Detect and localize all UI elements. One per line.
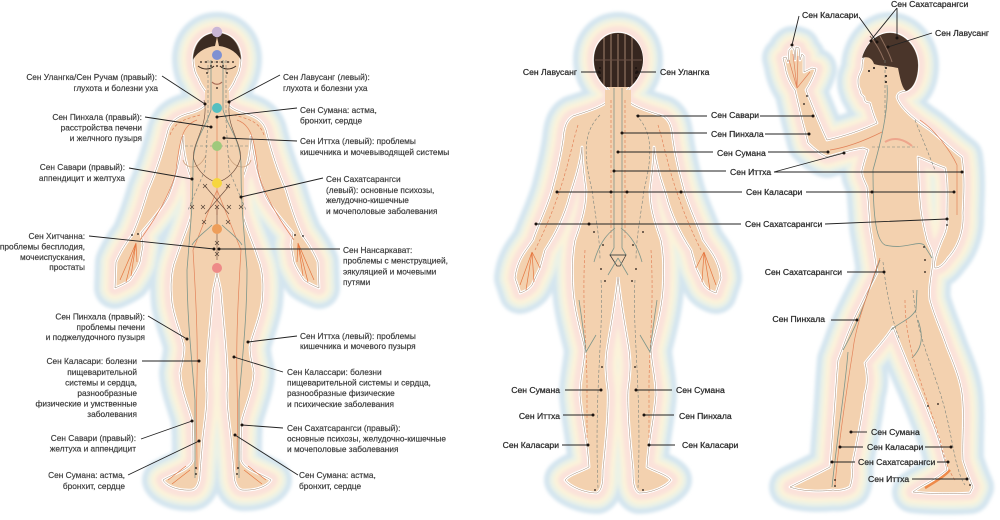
callout: Сен Сумана нижний левый	[48, 440, 200, 491]
callout: Сен Савари правый	[39, 162, 194, 183]
callout: Сен Пинхала правый нижний	[46, 312, 188, 342]
callout: Сен Иттха centre: Сен Иттха	[730, 167, 771, 177]
callout: side Сен Калаcари: Сен Каласари	[867, 442, 924, 452]
cross marks: front	[190, 184, 243, 256]
hair: side	[862, 33, 918, 91]
callout: side Сен Сахатсарангси ankle	[830, 457, 950, 467]
callout: back Сен Улангка	[636, 67, 710, 77]
energy lines: back	[520, 67, 716, 491]
callout: back Сен Улангка: Сен Улангка	[660, 67, 710, 77]
hands detail: back	[520, 252, 716, 290]
callout: side Сен Сумана: Сен Сумана	[871, 427, 920, 437]
callout: Сен Пинхала правый нижний: проблемы печени	[76, 322, 145, 332]
callout: side Сен Иттха: Сен Иттха	[868, 474, 909, 484]
callout: Сен Сахатсарангси левый: и мочеполовые заболевания	[326, 206, 437, 216]
callout: Сен Сахатсарангси левый	[240, 174, 437, 216]
callout: Сен Сахатсарангси правый: основные психозы, желудочно-кишечные	[287, 434, 446, 444]
callout: Сен Савари нижний: желтуха и аппендицит	[50, 444, 136, 454]
callout: Сен Пинхала правый	[52, 112, 212, 143]
callout: Сен Нансаркават: Сен Нансаркават:	[343, 245, 412, 255]
callout: Сен Сахатсарангси centre: Сен Сахатсарангси	[745, 219, 822, 229]
callout: Сен Иттха левый	[222, 136, 449, 157]
callout: Сен Каласари: пищеварительной	[67, 367, 137, 377]
callout: back lower Сен Иттха: Сен Иттха	[519, 411, 560, 421]
callout: Сен Нансаркават: путями	[343, 277, 371, 287]
callout: Сен Пинхала правый нижний: Сен Пинхала (правый):	[55, 312, 145, 322]
callout: Сен Лавусанг левый: глухота и болезни уха	[283, 83, 368, 93]
callout: Сен Сахатсарангси левый: желудочно-кишечные	[326, 195, 409, 205]
callout: Сен Калассари	[232, 356, 431, 409]
figure: side body	[783, 33, 973, 494]
energy lines: front	[131, 60, 304, 478]
callout: Сен Нансаркават	[218, 245, 448, 287]
callout: top Сен Лавусанг	[886, 28, 989, 48]
callout: back lower left Сен Сумана: Сен Сумана	[511, 385, 560, 395]
callout: Сен Калаcари centre: Сен Каласари	[746, 187, 803, 197]
callout: side Сен Иттха	[868, 474, 968, 484]
callout: Сен Пинхала правый: Сен Пинхала (правый):	[52, 112, 142, 122]
callout: Сен Сумана верх: Сен Сумана: астма,	[300, 105, 377, 115]
hair: back	[594, 33, 643, 87]
callout: Сен Сахатсарангси centre	[534, 218, 948, 229]
callout: Сен Пинхала centre	[620, 129, 810, 139]
callout: Сен Пинхала правый: расстройства печени	[61, 122, 142, 132]
callout: Сен Иттха левый нижний: кишечника и мочевого пузыря	[300, 341, 416, 351]
callout: back lower Сен Пинхала: Сен Пинхала	[679, 411, 732, 421]
callout: Сен Сумана нижний правый: Сен Сумана: астма,	[299, 470, 376, 480]
callout: Сен Савари нижний	[50, 420, 194, 454]
callout: Сен Каласари: Сен Каласари: болезни	[46, 356, 137, 366]
callout: Сен Иттха centre	[612, 152, 964, 177]
aura glow around all figures	[115, 33, 973, 494]
callout: Сен Каласари: разнообразные	[77, 388, 137, 398]
callout: Сен Хитчанна: проблемы бесплодия,	[0, 242, 85, 252]
hair: front	[193, 33, 241, 60]
callout: Сен Улангка/Сен Ручам: глухота и болезни уха	[74, 83, 158, 93]
callout: Сен Иттха левый нижний: Сен Иттха (левый): проблемы	[300, 331, 416, 341]
callout: Сен Сахатсарангси левый: (левый): основные психозы,	[326, 185, 434, 195]
callout: Сен Хитчанна: Сен Хитчанна:	[29, 231, 85, 241]
callout: back Сен Лавусанг: Сен Лавусанг	[523, 67, 577, 77]
callout: back lower right Сен Калаcари	[648, 440, 739, 450]
callout: Сен Сумана верх	[216, 105, 377, 126]
callout: Сен Иттха левый нижний	[246, 331, 416, 351]
callout: side Сен Сумана	[850, 427, 920, 437]
callout: Сен Пинхала centre: Сен Пинхала	[711, 129, 764, 139]
callout: Сен Каласари: системы и сердца,	[65, 378, 137, 388]
callout: Сен Сахатсарангси левый: Сен Сахатсарангси	[326, 174, 401, 184]
callout: back lower left Сен Сумана	[511, 385, 602, 395]
callout: side Сен Пинхала	[772, 314, 858, 324]
callout: Сен Лавусанг левый	[228, 72, 370, 104]
callout: Сен Сумана нижний левый: бронхит, сердце	[63, 481, 125, 491]
callout: Сен Хитчанна	[0, 231, 216, 272]
callout: Сен Савари centre	[636, 110, 814, 120]
callout: Сен Улангка/Сен Ручам	[26, 72, 206, 106]
callout: side Сен Сахатсарангси thigh: Сен Сахатсарангси	[765, 267, 842, 277]
callout: Сен Иттха левый: Сен Иттха (левый): проблемы	[300, 136, 416, 146]
callout: Сен Савари centre: Сен Савари	[711, 110, 759, 120]
callout: Сен Пинхала правый: и желчного пузыря	[70, 133, 142, 143]
callout: Сен Каласари	[36, 356, 200, 419]
callout: back lower Сен Иттха	[519, 411, 594, 421]
acupoint dots: front	[131, 61, 304, 475]
callout: top Сен Сахатсарангси	[870, 0, 968, 42]
callout: Сен Лавусанг левый: Сен Лавусанг (левый):	[283, 72, 370, 82]
callout: Сен Калассари: Сен Калассари: болезни	[287, 367, 382, 377]
callout: Сен Сумана centre	[616, 148, 830, 158]
callout: Сен Савари нижний: Сен Савари (правый):	[51, 433, 136, 443]
callout: Сен Каласари: заболевания	[87, 409, 137, 419]
callout: side Сен Калаcари	[838, 442, 952, 452]
callout: Сен Сумана верх: бронхит, сердце	[300, 116, 363, 126]
callout: back Сен Лавусанг	[523, 67, 600, 77]
callout: top Сен Лавусанг: Сен Лавусанг	[935, 28, 989, 38]
figure: back body	[515, 33, 721, 493]
hands detail: front	[120, 243, 314, 484]
callout: Сен Хитчанна: простаты	[49, 262, 85, 272]
figure: front body	[115, 33, 319, 490]
callout: Сен Савари правый: аппендицит и желтуха	[39, 173, 125, 183]
callout: Сен Улангка/Сен Ручам: Сен Улангка/Сен Ручам (правый):	[26, 72, 157, 82]
callout: Сен Савари правый: Сен Савари (правый):	[40, 162, 125, 172]
callout: back lower right Сен Сумана: Сен Сумана	[676, 385, 725, 395]
callout: Сен Сумана нижний левый: Сен Сумана: астма,	[48, 470, 125, 480]
callout: back lower right Сен Сумана	[634, 385, 725, 395]
callout: Сен Сумана нижний правый: бронхит, сердце	[299, 481, 362, 491]
callout: top Сен Каласари hand	[790, 10, 878, 46]
energy lines: side	[873, 85, 932, 258]
callout: Сен Сахатсарангси правый: Сен Сахатсарангси (правый):	[287, 423, 400, 433]
callout: side Сен Пинхала: Сен Пинхала	[772, 314, 825, 324]
callout: Сен Калаcари centre	[556, 187, 956, 197]
callout: Сен Хитчанна: мочеиспускания,	[20, 252, 85, 262]
callout: Сен Калассари: разнообразные физические	[287, 388, 395, 398]
callout: side Сен Сахатсарангси ankle: Сен Сахатсарангси	[858, 457, 935, 467]
callout: Сен Каласари: физические и умственные	[36, 398, 137, 408]
callout: Сен Пинхала правый нижний: и поджелудочного пузыря	[46, 332, 145, 342]
callout: back lower left Сен Калаcари	[503, 440, 590, 450]
callout: Сен Нансаркават: эякуляцией и мочевыми	[343, 266, 437, 276]
chakras	[212, 27, 222, 273]
callout: Сен Иттха левый: кишечника и мочевыводящей системы	[300, 147, 449, 157]
callout: Сен Сумана centre: Сен Сумана	[717, 148, 766, 158]
callout: Сен Калассари: пищеварительной системы и сердца,	[287, 378, 431, 388]
callout: side Сен Сахатсарангси thigh	[765, 267, 886, 277]
acupoint dots: back	[593, 67, 644, 491]
callout: Сен Нансаркават: проблемы с менструацией,	[343, 256, 448, 266]
callout: back lower right Сен Калаcари: Сен Каласари	[682, 440, 739, 450]
callout: top Сен Каласари hand: Сен Каласари	[802, 10, 859, 20]
callout: Сен Калассари: и психические заболевания	[287, 399, 394, 409]
callout: back lower Сен Пинхала	[642, 411, 732, 421]
acupoint dots: side	[803, 67, 971, 487]
callout: Сен Сумана нижний правый	[234, 434, 376, 491]
callout: Сен Сахатсарангси правый: и мочеполовые заболевания	[287, 444, 398, 454]
callout: back lower left Сен Калаcари: Сен Каласари	[503, 440, 559, 450]
callout: Сен Сахатсарангси правый	[240, 423, 446, 454]
